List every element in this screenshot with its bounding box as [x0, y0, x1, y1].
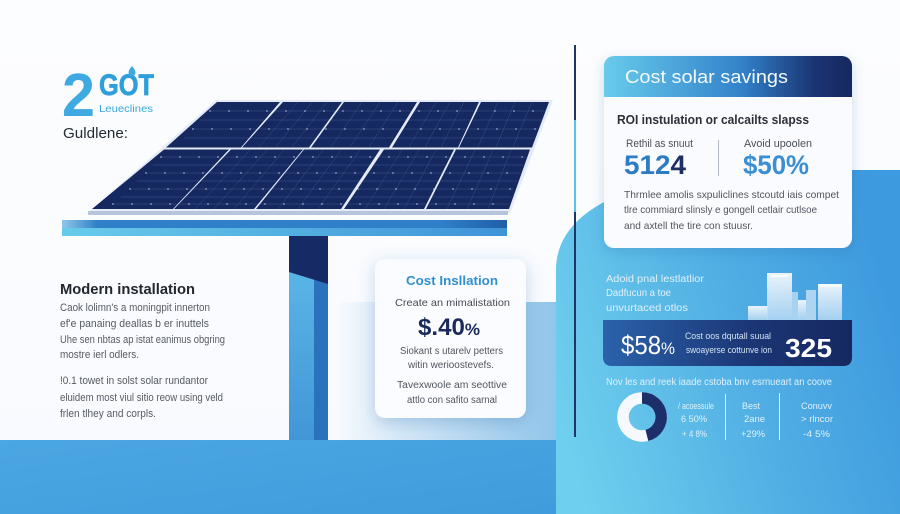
note text on blue: unvurtaced otlos — [606, 303, 688, 314]
banner stat left: $58% — [621, 330, 675, 360]
stat column 3: > rlncor — [801, 414, 833, 425]
icon: city buildings — [748, 273, 842, 320]
metric left: Rethil as snuut — [626, 138, 693, 150]
background panel behind cost card — [340, 302, 556, 440]
card: cost installation — [375, 259, 526, 418]
solar panel array — [88, 100, 554, 215]
card paragraph: tlre commiard slinsly e gongell cetlair cutlsoe — [624, 204, 817, 216]
stat column 2 — [741, 401, 766, 440]
card text: Siokant s utarelv petters — [400, 346, 503, 357]
logo: 2 — [62, 61, 95, 129]
header bar — [604, 56, 852, 97]
body text: ef'e panaing deallas b er inuttels — [60, 318, 209, 330]
stat column 1 — [678, 401, 714, 440]
mounting post — [289, 236, 328, 440]
subheading: ROI instulation or calcailts slapss — [617, 112, 809, 127]
metric right: Avoid upoolen — [744, 138, 812, 150]
stat banner — [603, 320, 852, 366]
metric right: $50% — [743, 150, 809, 180]
chart caption: Nov les and reek iaade cstoba bnv esrnueart an coove — [606, 377, 832, 388]
logo — [62, 61, 154, 129]
donut chart — [623, 398, 661, 436]
body text: frlen tlhey and corpls. — [60, 408, 156, 420]
body text — [60, 302, 225, 420]
stat column 1: / acoessule — [678, 401, 714, 412]
stat divider 1 — [725, 394, 726, 440]
body text: eluidem most viul sitio reow using veld — [60, 392, 223, 404]
card text — [397, 346, 507, 406]
note text on blue — [606, 274, 705, 314]
card text: attlo con safito sarnal — [407, 395, 497, 406]
stat column 3: Conuvv — [801, 401, 832, 412]
metric left — [624, 138, 693, 180]
logo: GOT — [99, 69, 154, 102]
body text: Uhe sen nbtas ap istat eanimus obgring — [60, 334, 225, 346]
stat column 2: Best — [742, 401, 760, 412]
right blue panel — [556, 170, 900, 514]
subtitle: Guldlene: — [63, 125, 128, 142]
card title: Cost Insllation — [406, 274, 498, 288]
metric left: 5124 — [624, 150, 686, 180]
header title: Cost solar savings — [625, 66, 788, 87]
stat column 2: +29% — [741, 429, 766, 440]
card: cost solar savings — [604, 56, 852, 248]
note text on blue: Adoid pnal lestlatlior — [606, 274, 705, 285]
heading: Modern installation — [60, 281, 195, 298]
card text: Tavexwoole am seottive — [397, 380, 507, 391]
stat column 1: 6 50% — [681, 414, 708, 425]
metric divider — [718, 140, 719, 176]
banner text: swoayerse cottunve ion — [686, 345, 772, 356]
mounting bar — [62, 220, 507, 236]
card intro: Create an mimalistation — [395, 297, 510, 309]
section: modern installation — [60, 281, 225, 420]
card paragraph: and axtell the tire con stuusr. — [624, 220, 753, 232]
stat column 1: + 4 8% — [682, 429, 707, 440]
card paragraph: Thrmlee amolis sxpuliclines stcoutd iais compet — [624, 189, 839, 201]
banner text: Cost oos dqutall suual — [685, 331, 771, 342]
banner stat right: 325 — [785, 333, 832, 363]
stat divider 2 — [779, 393, 780, 440]
bottom blue band — [0, 440, 557, 514]
stat column 2: 2ane — [744, 414, 765, 425]
card text: witin werioostevefs. — [407, 360, 494, 371]
stat column 3 — [801, 401, 833, 440]
body text: !0.1 towet in solst solar rundantor — [60, 375, 208, 387]
card paragraph — [624, 189, 839, 232]
card figure: $.40% — [418, 314, 480, 341]
logo: Leueclines — [99, 103, 153, 115]
banner text — [685, 331, 772, 356]
stat column 3: -4 5% — [803, 429, 831, 440]
body text: Caok lolimn's a moningpit innerton — [60, 302, 210, 314]
vertical divider line — [574, 45, 576, 437]
note text on blue: Dadfucun a toe — [606, 288, 671, 299]
body text: mostre ierl odlers. — [60, 349, 139, 361]
